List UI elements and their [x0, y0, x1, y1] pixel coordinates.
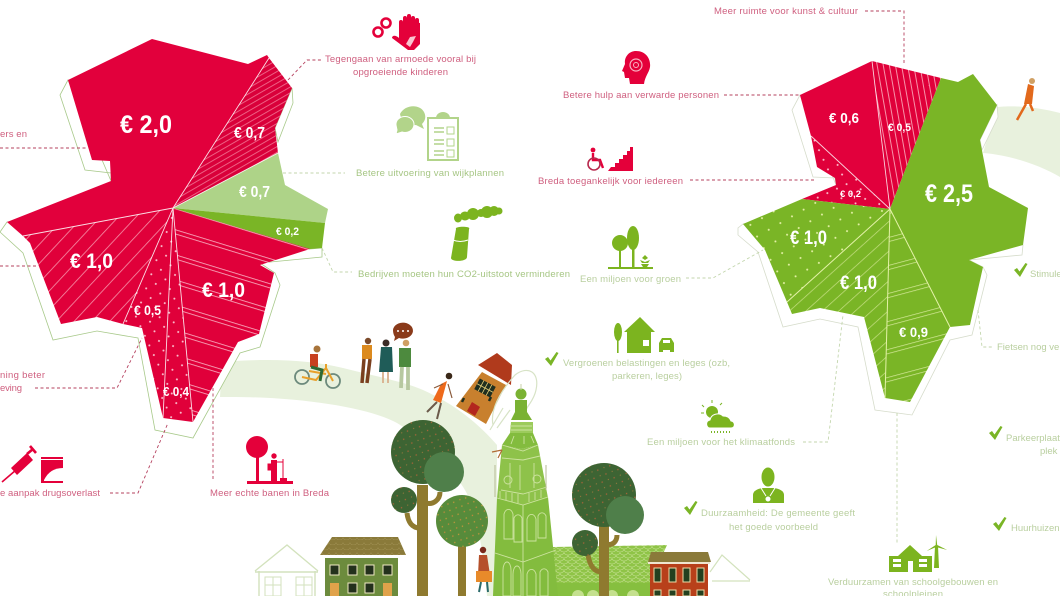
icon: factory chimney with smoke — [451, 206, 502, 261]
amount € 2,5: € 2,5 — [925, 180, 973, 208]
green segment dividers — [787, 209, 950, 398]
red brick house — [648, 552, 711, 596]
dashed connectors: red — [0, 11, 904, 493]
segment: € 2,5 — [890, 74, 1028, 327]
illustration: three people talking — [362, 323, 413, 390]
label: verwarde personen: Betere hulp aan verwarde personen — [563, 90, 719, 101]
icon: tree with worker — [246, 436, 293, 484]
segment: € 1,0 dotted — [743, 199, 890, 302]
speech bubble — [393, 323, 413, 341]
illustration: right buildings — [553, 545, 750, 596]
background band: path through the city — [220, 360, 497, 596]
segment: € 0,2 green — [173, 208, 325, 249]
tower details — [495, 426, 556, 596]
woman in teal dress — [379, 340, 393, 383]
green scaled building — [553, 545, 667, 583]
segment: € 1,0 hatched — [787, 209, 890, 398]
segment: € 1,0 striped — [173, 208, 310, 422]
tower middle — [497, 445, 548, 505]
illustration: right tree — [572, 463, 644, 596]
illustration: tower — [492, 384, 558, 596]
icon: syringe and package — [2, 446, 63, 483]
white outline house right — [710, 555, 750, 581]
label: kunst en cultuur: Meer ruimte voor kunst & cultuur — [714, 6, 858, 17]
segment: € 0,6 — [800, 61, 890, 209]
icon: chat and clipboard — [396, 106, 458, 160]
label: drugsoverlast: e aanpak drugsoverlast — [0, 488, 100, 499]
illustration: runner — [1017, 78, 1035, 120]
segment: € 0,5 stripes — [872, 61, 941, 209]
chimney smoke cloud — [454, 206, 502, 222]
flying bird on tower — [492, 450, 502, 458]
label: clipped left middle: ning beter — [0, 370, 45, 381]
amount € 2,0: € 2,0 — [120, 111, 172, 139]
tower drum — [510, 422, 533, 433]
tower base — [493, 497, 558, 596]
green building base — [553, 583, 653, 596]
label: clipped left middle: eving — [0, 383, 22, 394]
segment: € 2,0 — [7, 39, 269, 236]
illustration: middle tree — [436, 495, 488, 596]
label: clipped left top: ers en — [0, 129, 27, 140]
amount € 0,9: € 0,9 — [899, 324, 928, 340]
panel: right investment shape (green) — [738, 61, 1028, 415]
green labels — [356, 168, 1060, 596]
illustration: left tree — [391, 420, 464, 596]
amount € 0,2 red: € 0,2 — [840, 189, 861, 199]
icon: school and windmill — [889, 535, 947, 572]
segment dividers — [23, 58, 278, 422]
label: wijkplannen: Betere uitvoering van wijkplannen — [356, 168, 504, 179]
illustration: tilted house — [456, 353, 512, 424]
label: armoede: opgroeiende kinderen — [353, 67, 448, 78]
label: belastingen: parkeren, leges) — [612, 371, 682, 382]
label: duurzaamheid: Duurzaamheid: De gemeente geeft — [701, 508, 855, 519]
label: toegankelijk: Breda toegankelijk voor iedereen — [538, 176, 683, 187]
segment: € 0,7 hatched — [173, 58, 292, 208]
right shape outline — [738, 95, 1023, 415]
dashed connectors: green — [283, 173, 993, 543]
illustration: walking woman — [427, 373, 452, 419]
segment: € 1,0 diagonal hatch — [23, 208, 173, 324]
label: armoede — [325, 54, 476, 78]
amount € 1,0 hatched: € 1,0 — [840, 273, 877, 294]
background band: right path — [983, 106, 1060, 177]
label: banen: Meer echte banen in Breda — [210, 488, 330, 499]
label: belastingen: Vergroenen belastingen en leges (ozb, — [563, 358, 730, 369]
man in green — [399, 340, 411, 390]
tower crown — [502, 433, 538, 449]
label: schoolgebouwen — [828, 577, 998, 596]
green house — [320, 537, 406, 596]
icon: coins and hands — [374, 14, 420, 50]
icon: person with medal — [753, 468, 784, 503]
amount € 0,5: € 0,5 — [134, 302, 161, 318]
label: parkeerplaatsen — [1006, 433, 1060, 457]
label: clipped left middle — [0, 370, 45, 394]
amount € 0,6: € 0,6 — [829, 110, 859, 127]
label: groen: Een miljoen voor groen — [580, 274, 681, 285]
amount € 0,7 light: € 0,7 — [239, 184, 270, 201]
tower flare — [511, 412, 532, 420]
icon: trees and plant — [608, 226, 653, 269]
amount € 0,5 red: € 0,5 — [888, 122, 911, 134]
amount € 0,7: € 0,7 — [234, 125, 265, 142]
tower neck — [515, 400, 527, 412]
illustration: left houses — [255, 537, 406, 596]
tower finial — [520, 384, 522, 390]
panel: left investment shape (red) — [0, 39, 328, 438]
icon: tree, house and car — [614, 317, 674, 353]
icon: cloud and sun — [701, 400, 734, 432]
label: schoolgebouwen: Verduurzamen van schoolgebouwen en — [828, 577, 998, 588]
amount € 1,0 left: € 1,0 — [70, 250, 113, 273]
amount € 0,4: € 0,4 — [163, 384, 190, 399]
woman in orange — [362, 338, 372, 383]
tower flanking spikes — [495, 465, 546, 497]
label: belastingen — [563, 358, 730, 382]
label: parkeerplaatsen: plek — [1040, 446, 1058, 457]
label: armoede: Tegengaan van armoede vooral bij — [325, 54, 476, 65]
white outline house — [255, 545, 318, 596]
segment: € 0,4 dotted — [163, 208, 193, 422]
segment: € 0,2 dotted — [802, 136, 890, 209]
tower bulb — [516, 388, 526, 400]
amount € 0,2: € 0,2 — [276, 226, 299, 238]
label: duurzaamheid: het goede voorbeeld — [729, 522, 818, 533]
left shape outline — [0, 80, 322, 438]
check marks — [545, 263, 1028, 531]
red segment dividers — [811, 61, 890, 209]
red labels — [0, 6, 858, 499]
label: duurzaamheid — [701, 508, 855, 533]
label: CO2: Bedrijven moeten hun CO2-uitstoot verminderen — [358, 269, 570, 280]
label: klimaatfonds: Een miljoen voor het klimaatfonds — [647, 437, 795, 448]
segment: € 0,9 striped — [885, 209, 950, 402]
illustration: outline shape behind the tower — [490, 370, 537, 430]
icon: head with spiral — [622, 51, 650, 84]
amount € 1,0 dotted: € 1,0 — [790, 228, 827, 249]
illustration: woman with shopping bag — [476, 547, 492, 592]
segment: € 0,5 dotted — [123, 208, 173, 418]
illustration: cyclist — [295, 346, 340, 388]
amount € 1,0 right: € 1,0 — [202, 279, 245, 302]
segment: € 0,7 light green — [173, 153, 328, 223]
icon: wheelchair and stairs — [588, 147, 633, 171]
label: huurhuizen: Huurhuizen — [1011, 523, 1060, 534]
